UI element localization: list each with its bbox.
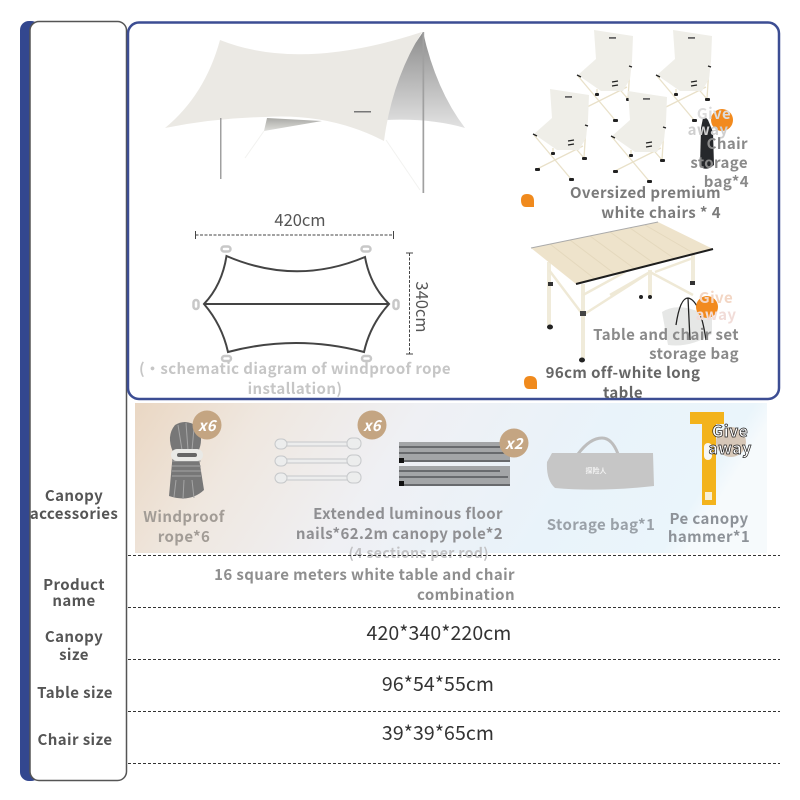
- badge: rope x6: [192, 410, 222, 440]
- label: 96cm off-white long table: 96cm off-white long: [546, 362, 700, 383]
- icon: yellow hammer with give-away badge: Give: [712, 418, 748, 442]
- badge: poles x2: x2: [505, 433, 524, 454]
- icon: yellow hammer with give-away badge: away: [708, 435, 752, 459]
- label: canopy size: size: [59, 644, 89, 665]
- badge: poles x2: [500, 428, 528, 458]
- caption: windproof rope schematic: [139, 358, 451, 399]
- icon: orange marker, table: [524, 376, 537, 389]
- dimension: 340cm: [406, 253, 435, 354]
- icon: windproof rope: [169, 422, 204, 499]
- label: canopy size: Canopy: [45, 626, 103, 647]
- badge: nails x6: [358, 410, 386, 440]
- row value: product name: [214, 564, 515, 605]
- row value: table size: 96*54*55cm: [382, 668, 494, 697]
- label: nails and poles: Extended luminous floor: [313, 503, 503, 524]
- storage bag with give-away badge: Give: [699, 287, 733, 308]
- label: windproof rope: rope*6: [158, 526, 210, 547]
- icon: orange marker, chairs: [521, 194, 534, 207]
- label: pe canopy hammer: Pe canopy: [669, 508, 749, 529]
- dimension: 340cm: 340cm: [411, 281, 435, 333]
- panel: row label column: [30, 22, 126, 780]
- label: table size: Table size: [37, 682, 113, 703]
- caption: windproof rope schematic: (·schematic diagram of windproof rope: [139, 358, 451, 379]
- label: table and chair set storage bag: [593, 324, 739, 364]
- label: chair storage bag: [690, 133, 749, 192]
- badge: nails x6: x6: [363, 415, 383, 436]
- label: chair storage bag: bag*4: [704, 171, 749, 192]
- label: storage bag: Storage bag*1: [547, 514, 655, 535]
- label: chair storage bag: Chair: [707, 133, 748, 154]
- give-away badge: chair storage bag: Give: [697, 103, 731, 124]
- label: product name: Product: [43, 574, 105, 595]
- label: 96cm off-white long table: [546, 362, 700, 403]
- dimension: 420cm: 420cm: [274, 207, 326, 231]
- row value: product name: 16 square meters white table and chair: [214, 564, 515, 585]
- label: oversized premium white chairs: [570, 182, 721, 223]
- icon: canopy poles: [399, 442, 510, 486]
- icon: yellow hammer with give-away badge: [690, 412, 752, 505]
- label: canopy size: [45, 626, 103, 665]
- label: 96cm off-white long table: table: [603, 382, 643, 403]
- label: chair size: Chair size: [38, 729, 112, 750]
- left blue accent bar: [20, 21, 40, 781]
- row value: chair size: 39*39*65cm: [382, 717, 494, 746]
- label: table and chair set storage bag: Table and chair set: [593, 324, 739, 345]
- label: nails and poles: (4 sections per rod): [349, 543, 489, 563]
- give-away badge: chair storage bag: [688, 103, 733, 169]
- label: oversized premium white chairs: white chairs * 4: [601, 202, 721, 223]
- panel: canopy and furniture: [128, 22, 779, 403]
- give-away badge: chair storage bag: away: [688, 119, 728, 140]
- panel: canopy accessories: [135, 403, 767, 563]
- canopy schematic: [194, 246, 398, 361]
- label: product name: name: [52, 590, 96, 611]
- row value: canopy size: 420*340*220cm: [367, 617, 511, 646]
- label: canopy accessories: Canopy: [45, 485, 103, 506]
- row value: product name: combination: [417, 584, 515, 605]
- icon: storage bag: 探险人: [586, 466, 606, 476]
- tent illustration: [165, 32, 465, 193]
- dimension: 420cm: [196, 207, 394, 239]
- icon: luminous floor nails: [275, 438, 361, 483]
- chairs illustration: [533, 30, 712, 183]
- storage bag with give-away badge: [662, 287, 736, 346]
- label: windproof rope: Windproof: [143, 506, 226, 527]
- label: pe canopy hammer: hammer*1: [668, 526, 750, 547]
- label: canopy accessories: accessories: [30, 503, 118, 524]
- label: chair storage bag: storage: [690, 152, 748, 173]
- badge: rope x6: x6: [198, 415, 218, 436]
- label: oversized premium white chairs: Oversized premium: [570, 182, 721, 203]
- table illustration: [531, 222, 713, 362]
- caption: windproof rope schematic: installation): [248, 378, 342, 399]
- label: canopy accessories: [30, 485, 118, 524]
- label: table and chair set storage bag: storage bag: [649, 343, 739, 364]
- label: windproof rope: [143, 506, 226, 547]
- label: pe canopy hammer: [668, 508, 750, 547]
- label: product name: [43, 574, 105, 611]
- label: nails and poles: [296, 503, 503, 563]
- icon: storage bag: [547, 438, 654, 490]
- storage bag with give-away badge: away: [696, 304, 736, 325]
- label: nails and poles: nails*62.2m canopy pole*2: [296, 523, 503, 544]
